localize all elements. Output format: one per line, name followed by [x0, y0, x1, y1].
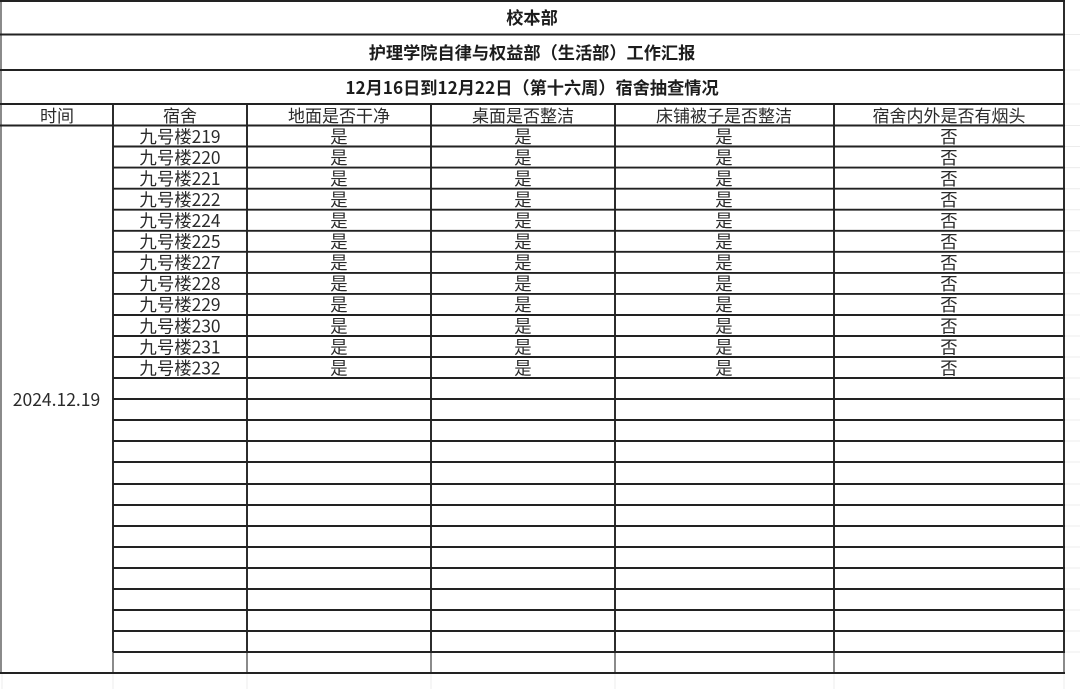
row: room 225: 九号楼225: [139, 229, 221, 254]
row: room 232: 是: [514, 356, 532, 380]
row: room 232: 是: [715, 356, 733, 380]
row: room 220: [139, 145, 958, 170]
row: room 227: 是: [715, 250, 733, 275]
row: room 221: 是: [330, 166, 348, 191]
row: room 230: 是: [715, 314, 733, 338]
row: room 232: [139, 356, 958, 380]
row: room 224: 是: [330, 208, 348, 233]
row: room 230: 是: [330, 314, 348, 338]
row: room 220: 是: [715, 145, 733, 170]
row: room 229: 是: [514, 292, 532, 317]
table header row: [40, 102, 1026, 127]
row: room 231: 九号楼231: [139, 334, 221, 360]
row: room 227: 否: [940, 250, 958, 275]
row: room 220: 是: [330, 145, 348, 170]
row: room 219: 否: [940, 124, 958, 149]
row: room 228: 九号楼228: [139, 271, 221, 296]
row: room 224: 是: [715, 208, 733, 233]
row: room 219: [139, 124, 958, 149]
title: week 16 inspection: 12月16日到12月22日（第十六周）宿舍抽查情况: [345, 74, 719, 99]
row: room 221: [139, 166, 958, 191]
row: room 227: 是: [330, 250, 348, 275]
row: room 231: 否: [940, 334, 958, 360]
table header row: 床铺被子是否整洁: [656, 102, 792, 127]
row: room 229: 是: [330, 292, 348, 317]
row: room 221: 九号楼221: [139, 166, 221, 191]
row: room 225: 否: [940, 229, 958, 254]
row: room 229: 九号楼229: [139, 292, 221, 317]
title: department report: 护理学院自律与权益部（生活部）工作汇报: [369, 39, 695, 64]
table header row: 地面是否干净: [288, 102, 390, 127]
row: room 232: 是: [330, 356, 348, 380]
row: room 232: 九号楼232: [139, 356, 221, 380]
row: room 222: 是: [514, 187, 532, 212]
row: room 227: 九号楼227: [139, 250, 221, 275]
row: room 230: 是: [514, 314, 532, 338]
row: room 222: 是: [715, 187, 733, 212]
row: room 228: 否: [940, 271, 958, 296]
title: campus: 校本部: [506, 4, 558, 29]
row: room 231: 是: [715, 334, 733, 360]
row: room 230: 否: [940, 314, 958, 338]
row: room 227: 是: [514, 250, 532, 275]
row: room 222: 九号楼222: [139, 187, 221, 212]
row: room 225: 是: [715, 229, 733, 254]
row: room 227: [139, 250, 958, 275]
row: room 220: 是: [514, 145, 532, 170]
row: room 220: 否: [940, 145, 958, 170]
row: room 230: 九号楼230: [139, 314, 221, 338]
row: room 224: [139, 208, 958, 233]
row: room 221: 是: [514, 166, 532, 191]
row: room 221: 是: [715, 166, 733, 191]
row: room 219: 是: [330, 124, 348, 149]
table header row: 宿舍内外是否有烟头: [872, 102, 1026, 127]
row: room 229: 是: [715, 292, 733, 317]
row: room 224: 是: [514, 208, 532, 233]
row: room 231: 是: [330, 334, 348, 360]
row: room 219: 九号楼219: [139, 124, 221, 149]
row: room 231: 是: [514, 334, 532, 360]
table header row: 时间: [40, 102, 74, 127]
row: room 219: 是: [715, 124, 733, 149]
row: room 222: [139, 187, 958, 212]
row: room 224: 否: [940, 208, 958, 233]
row: room 228: [139, 271, 958, 296]
row: room 222: 是: [330, 187, 348, 212]
row: room 228: 是: [715, 271, 733, 296]
row: room 225: 是: [330, 229, 348, 254]
inspection date cell: 2024.12.19: [13, 387, 100, 412]
row: room 231: [139, 334, 958, 360]
row: room 229: 否: [940, 292, 958, 317]
row: room 219: 是: [514, 124, 532, 149]
row: room 225: 是: [514, 229, 532, 254]
row: room 230: [139, 314, 958, 338]
row: room 220: 九号楼220: [139, 145, 221, 170]
row: room 222: 否: [940, 187, 958, 212]
table header row: 宿舍: [163, 102, 197, 127]
row: room 232: 否: [940, 356, 958, 380]
table header row: 桌面是否整洁: [472, 102, 574, 127]
row: room 228: 是: [514, 271, 532, 296]
row: room 225: [139, 229, 958, 254]
row: room 221: 否: [940, 166, 958, 191]
row: room 229: [139, 292, 958, 317]
row: room 224: 九号楼224: [139, 208, 221, 233]
row: room 228: 是: [330, 271, 348, 296]
